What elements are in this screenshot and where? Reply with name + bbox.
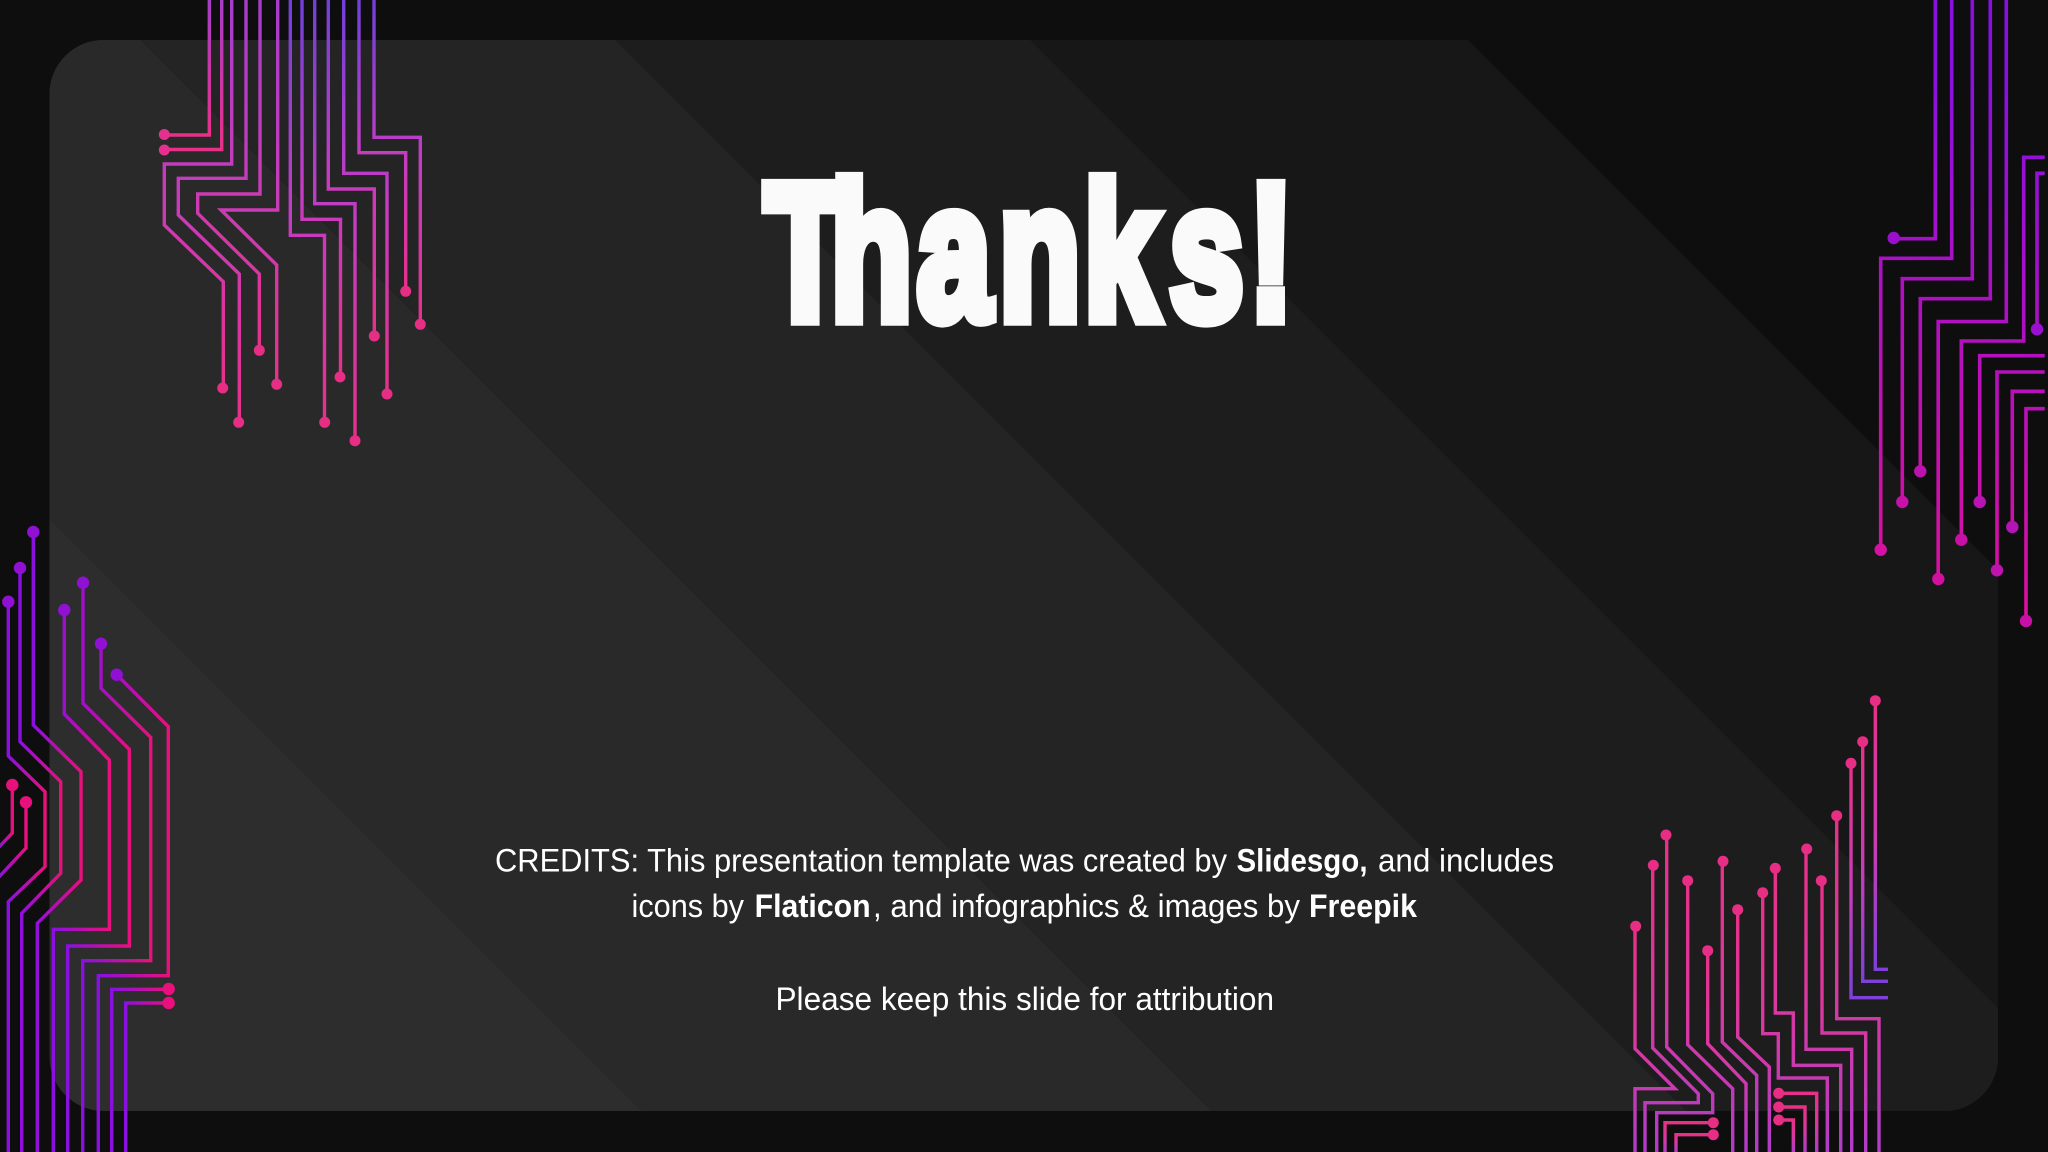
- circuit lines: bottom right: [1630, 695, 1888, 1152]
- text block: credits: and includes: [1378, 843, 1554, 879]
- circuit lines: top right: [1874, 0, 2045, 627]
- title: Thanks!: [765, 145, 1293, 361]
- text block: credits: Flaticon: [755, 888, 871, 924]
- text block: credits: CREDITS: This presentation template was created by: [495, 843, 1227, 879]
- text block: credits: Freepik: [1309, 888, 1417, 924]
- text block: credits: [495, 843, 1554, 924]
- circuit lines: bottom left: [0, 526, 175, 1152]
- text block: credits: , and infographics & images by: [873, 888, 1300, 924]
- text block: attribution note: Please keep this slide for attribution: [776, 981, 1274, 1017]
- circuit lines: top left: [159, 0, 426, 446]
- text block: credits: Slidesgo,: [1236, 843, 1368, 879]
- text block: credits: icons by: [632, 888, 744, 924]
